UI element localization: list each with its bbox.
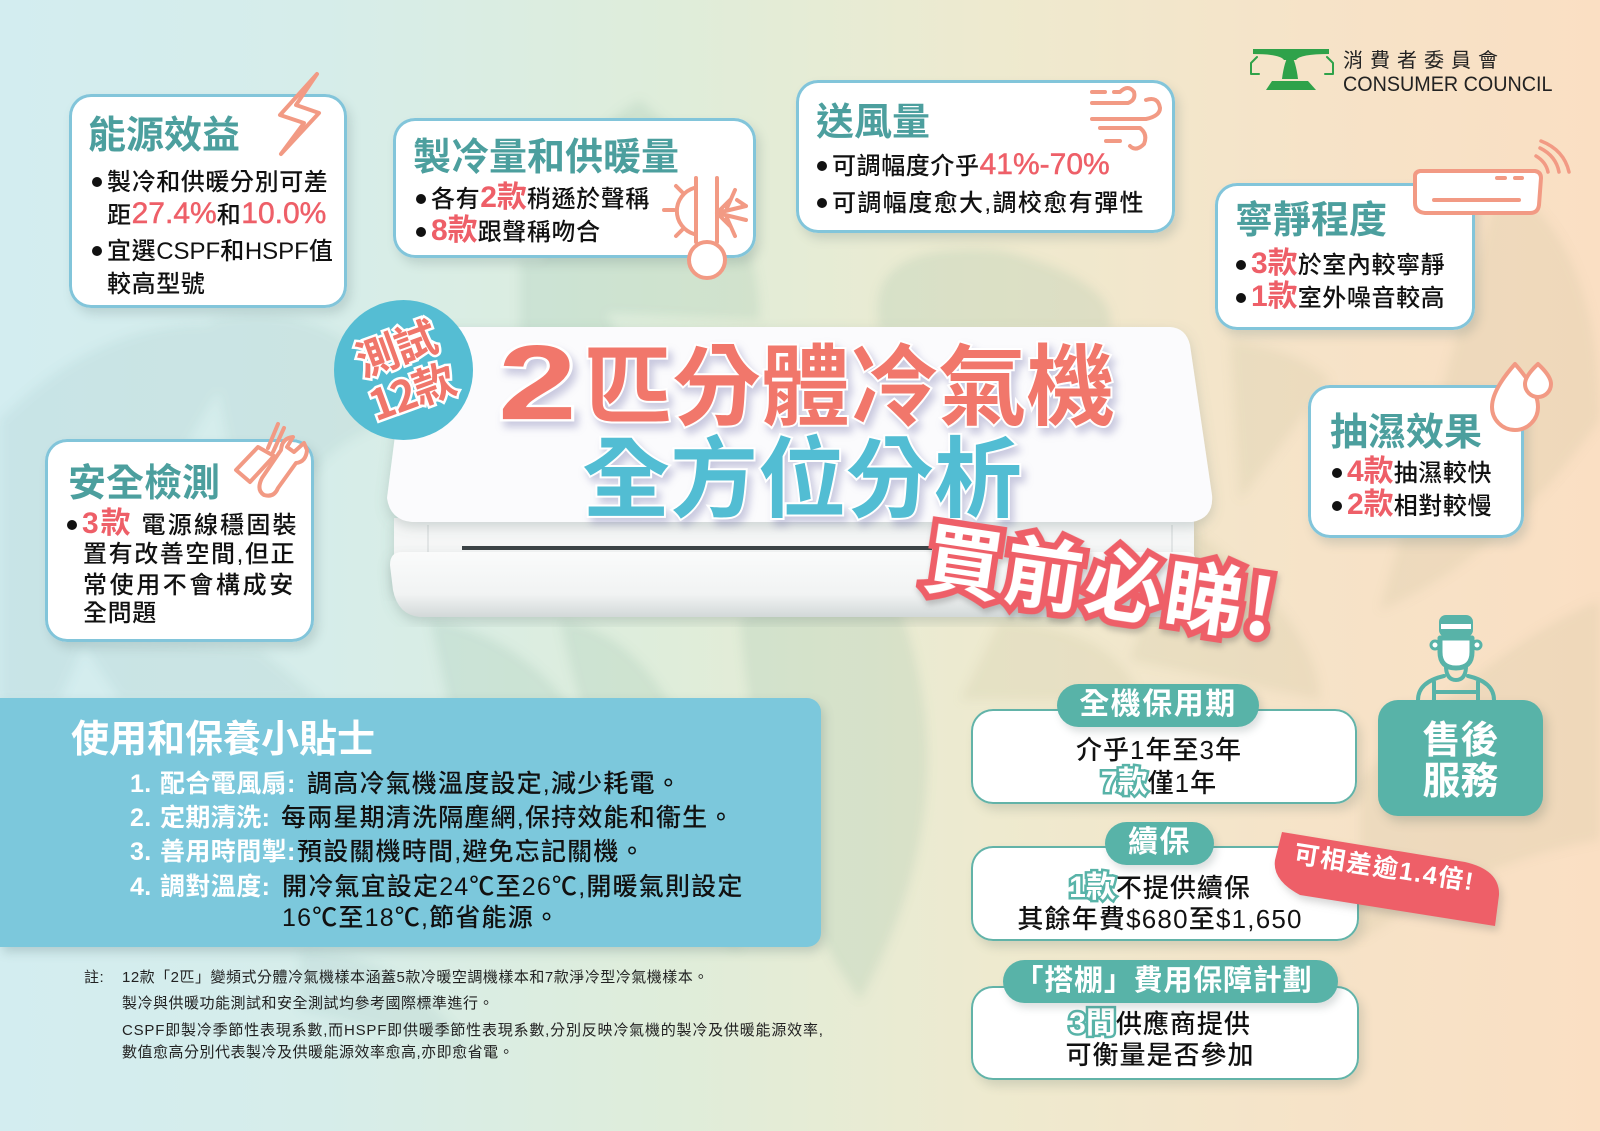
panel: scaffolding cost plan: 可衡量是否參加 [1065,1040,1254,1070]
label: warranty period [1057,684,1259,727]
footnotes [84,969,824,1061]
text: quietness details: 3款於室內較寧靜 [1251,247,1445,280]
tip 3: 3. [130,838,152,866]
slogan: must read before buying: 買前必睇! [918,497,1286,660]
text: safety details: 常使用不會構成安 [83,572,296,599]
title line 2: 全方位分析 [582,409,1022,536]
tip 1 [130,770,682,798]
text: airflow details [817,148,1145,217]
panel: scaffolding cost plan [971,986,1359,1080]
icon: screwdriver and wrench [236,424,307,496]
footnotes: 數值愈高分別代表製冷及供暖能源效率愈高,亦即愈省電。 [122,1044,514,1061]
panel: scaffolding cost plan: 3間供應商提供 [1069,1007,1251,1040]
text: dehumidification details: 4款抽濕較快 [1347,455,1492,488]
panel: extended warranty [971,846,1359,941]
panel: energy efficiency [69,94,347,308]
heading: quietness: 寧靜程度 [1235,189,1387,244]
text: dehumidification details: 2款相對較慢 [1347,488,1492,521]
badge: tested 12 models: 12款 [360,347,462,434]
heading: airflow: 送風量 [816,91,930,146]
text: airflow details: 可調幅度愈大,調校愈有彈性 [832,190,1145,217]
logo emblem [1251,49,1333,90]
text: energy efficiency details [92,169,333,298]
footnotes: 12款「2匹」變頻式分體冷氣機樣本涵蓋5款冷暖空調機樣本和7款淨冷型冷氣機樣本。 [122,969,709,986]
title line 1: 2 [498,323,577,442]
icon: sun and snowflake thermometer [664,178,746,278]
text: safety details: 置有改善空間,但正 [83,541,296,568]
label: warranty period: 全機保用期 [1079,688,1237,721]
footnotes: 註: [84,969,104,986]
panel: after-sales service: 售後 [1422,709,1498,764]
panel: warranty period: 介乎1年至3年 [1076,735,1242,765]
logo text: 消費者委員會 [1343,44,1505,73]
tip 3: 善用時間掣: [160,838,296,866]
text: capacity details [416,181,650,247]
panel: extended warranty: 1款不提供續保 [1069,871,1251,904]
heading: capacity: 製冷量和供暖量 [413,126,679,181]
panel: after-sales service [1378,700,1543,816]
tip 4: 4. [130,873,152,901]
heading: safety test: 安全檢測 [68,452,220,507]
label: extended warranty: 續保 [1128,826,1191,859]
panel: after-sales service: 服務 [1422,750,1498,805]
panel: usage and maintenance tips [0,698,821,947]
badge: tested 12 models [334,300,473,440]
heading: energy efficiency: 能源效益 [88,104,240,159]
tip 2: 2. [130,804,152,832]
tip 4 [130,873,744,932]
tip 1: 調高冷氣機溫度設定,減少耗電。 [307,770,682,798]
text: energy efficiency details: 距27.4%和10.0% [107,197,326,230]
text: airflow details: 可調幅度介乎41%-70% [832,148,1110,181]
tip 3 [130,838,646,866]
panel: warranty period: 7款僅1年 [1101,766,1217,799]
text: safety details: 3款 電源線穩固裝 [82,507,299,540]
label: extended warranty [1105,822,1214,865]
label: scaffolding cost plan: 「搭棚」費用保障計劃 [1014,965,1312,997]
heading: tips: 使用和保養小貼士 [71,708,375,763]
icon: air conditioner with signal [1415,141,1569,213]
callout: red tag: 可相差逾1.4倍! [1292,839,1477,896]
icon: service technician [1418,615,1494,700]
icon: water drops [1492,364,1551,430]
panel: safety test [45,439,314,642]
text: safety details [67,507,299,627]
text: dehumidification details [1332,455,1492,521]
tip 1: 配合電風扇: [160,770,296,798]
text: quietness details: 1款室外噪音較高 [1251,280,1445,313]
logo text [1343,44,1552,96]
title line 1: 匹分體冷氣機 [584,316,1115,444]
footnotes: CSPF即製冷季節性表現系數,而HSPF即供暖季節性表現系數,分別反映冷氣機的製冷及供暖能源效率, [122,1022,824,1039]
text: energy efficiency details: 宜選CSPF和HSPF值 [107,238,333,265]
heading: dehumidification: 抽濕效果 [1330,401,1482,456]
text: energy efficiency details: 較高型號 [107,271,205,298]
tip 4: 16℃至18℃,節省能源。 [282,904,560,932]
tip 3: 預設關機時間,避免忘記關機。 [297,838,646,866]
panel: warranty period [971,709,1357,804]
text: safety details: 全問題 [83,600,157,627]
icon: lightning bolt [280,74,319,154]
tip 4: 開冷氣宜設定24℃至26℃,開暖氣則設定 [282,873,744,901]
label: scaffolding cost plan [1003,960,1338,1003]
footnotes: 製冷與供暖功能測試和安全測試均參考國際標準進行。 [122,995,494,1012]
tip 2: 每兩星期清洗隔塵網,保持效能和衞生。 [281,804,735,832]
text: energy efficiency details: 製冷和供暖分別可差 [107,169,328,196]
panel: extended warranty: 其餘年費$680至$1,650 [1017,904,1303,934]
icon: wind [1092,88,1160,149]
text: quietness details [1236,247,1445,313]
text: capacity details: 8款跟聲稱吻合 [431,214,601,247]
tip 4: 調對溫度: [160,873,270,901]
panel: airflow [796,80,1175,233]
tip 2: 定期清洗: [160,804,270,832]
panel: cooling and heating capacity [393,118,756,258]
logo text: CONSUMER COUNCIL [1343,73,1552,96]
badge: tested 12 models: 測試 [347,304,444,389]
panel: quietness [1215,183,1475,330]
text: capacity details: 各有2款稍遜於聲稱 [431,181,650,214]
tip 1: 1. [130,770,152,798]
panel: dehumidification [1308,385,1524,538]
